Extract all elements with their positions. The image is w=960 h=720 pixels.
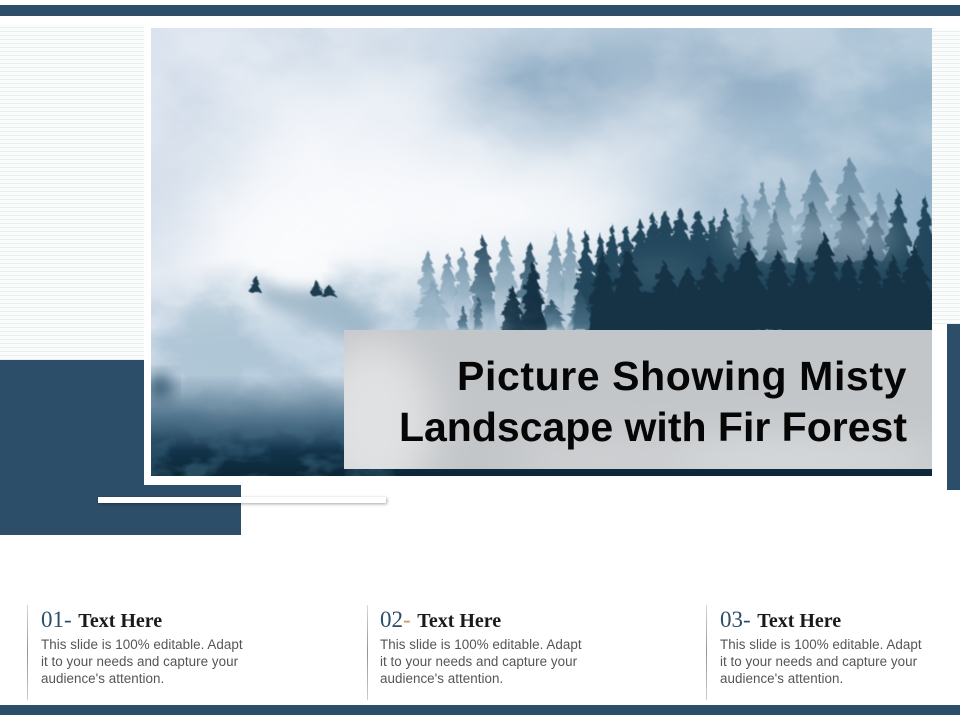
left ridge in fog <box>250 282 380 340</box>
fog shadow texture <box>151 260 547 420</box>
item 3 body: it to your needs and capture your <box>720 654 917 669</box>
panel cloud shading <box>344 332 922 469</box>
item 1 heading: 01- Text Here <box>41 607 162 632</box>
item 2 body: This slide is 100% editable. Adapt <box>380 637 582 652</box>
sky <box>151 28 932 429</box>
misted trunks left forest <box>456 235 594 336</box>
title: Landscape with Fir Forest <box>399 404 907 450</box>
divider 2 <box>367 605 368 700</box>
divider 1 <box>27 605 28 700</box>
sky shade texture <box>151 28 932 278</box>
item 3 body <box>720 637 922 686</box>
white accent bar <box>98 497 386 503</box>
bottom bar <box>0 705 960 715</box>
divider 3 <box>706 605 707 700</box>
title <box>399 353 907 450</box>
item 1 body <box>41 637 243 686</box>
item 2 <box>380 607 582 686</box>
item 2 body <box>380 637 582 686</box>
photo: misty fir forest <box>151 28 932 476</box>
dark tree tips on left ridge <box>249 274 337 297</box>
cloud texture <box>152 28 932 310</box>
striped background right <box>932 28 960 324</box>
item 3 body: This slide is 100% editable. Adapt <box>720 637 922 652</box>
near dark forest <box>498 232 939 340</box>
item 3 body: audience's attention. <box>720 671 843 686</box>
item 1 body: audience's attention. <box>41 671 164 686</box>
dark patch at left edge <box>147 374 173 402</box>
mid forest trees <box>572 190 943 332</box>
item 2 heading: 02- Text Here <box>380 607 501 632</box>
item 1 body: it to your needs and capture your <box>41 654 238 669</box>
navy block right <box>947 324 960 490</box>
blue fog base <box>140 310 340 390</box>
navy block lower <box>144 485 241 535</box>
lower forest in fog <box>151 375 932 476</box>
top bar <box>0 5 960 16</box>
mist between trees <box>620 214 900 278</box>
white photo frame <box>144 25 932 485</box>
item 1 <box>41 607 243 686</box>
title: Picture Showing Misty <box>457 353 907 399</box>
title panel <box>344 330 932 469</box>
blue sky patch <box>470 43 810 127</box>
far misted trees <box>410 157 904 340</box>
item 2 body: audience's attention. <box>380 671 503 686</box>
item 3 heading: 03- Text Here <box>720 607 841 632</box>
striped background left <box>0 24 144 360</box>
item 1 body: This slide is 100% editable. Adapt <box>41 637 243 652</box>
item 2 body: it to your needs and capture your <box>380 654 577 669</box>
bright cloud bank <box>150 70 710 340</box>
mottled forest texture <box>151 432 394 476</box>
item 3 <box>720 607 922 686</box>
navy block left <box>0 360 144 535</box>
